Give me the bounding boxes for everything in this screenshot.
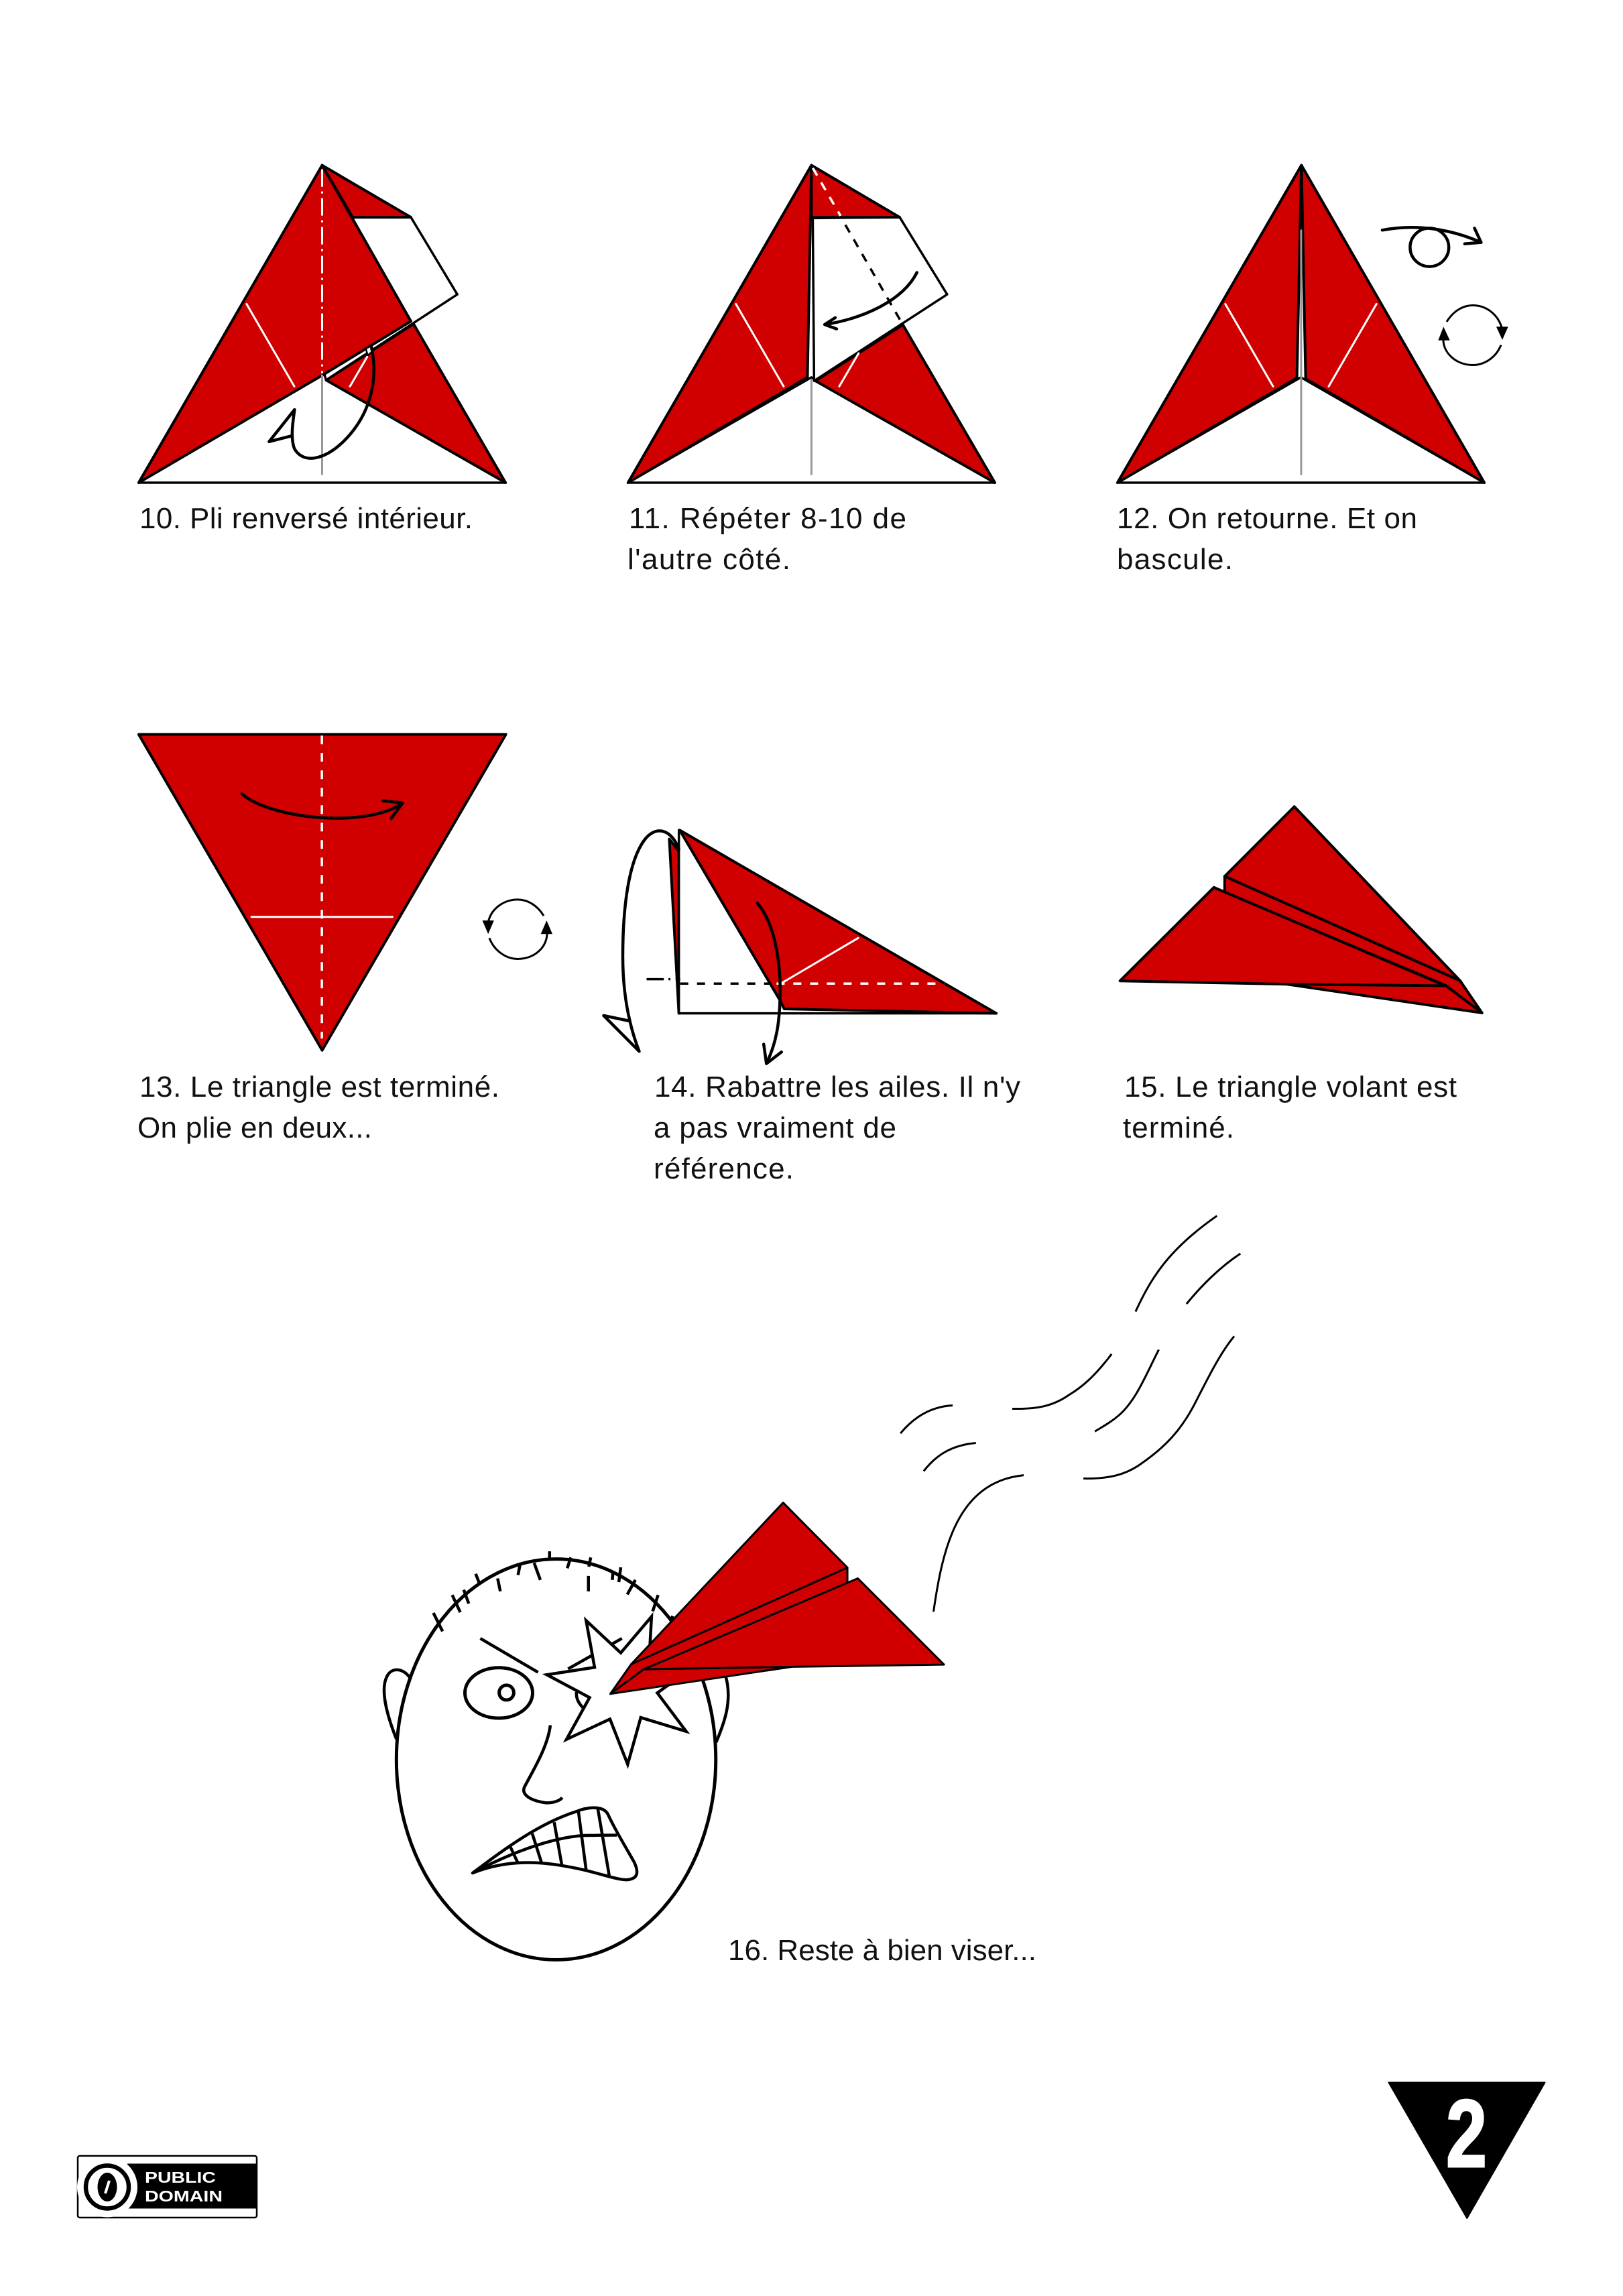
caption: step 13: On plie en deux... <box>137 1111 372 1144</box>
caption: step 13 <box>137 1071 499 1144</box>
panel: step 12 <box>1117 166 1508 576</box>
badge: public domain <box>77 2156 257 2218</box>
diagram: step 12 paper <box>1118 166 1508 483</box>
nose <box>524 1726 562 1803</box>
badge: page number <box>1389 2081 1545 2218</box>
diagram: step 10 paper <box>139 166 505 483</box>
illustration: angry face hit by glider <box>384 1503 944 1959</box>
arrow: fold toward centre <box>825 273 917 329</box>
caption: step 12: 12. On retourne. Et on <box>1117 502 1417 535</box>
panel: step 13 <box>137 735 552 1144</box>
caption: step 12: bascule. <box>1117 543 1233 576</box>
caption: step 14: référence. <box>654 1152 794 1185</box>
fold line: dashed valley <box>813 168 903 325</box>
caption: step 11: l'autre côté. <box>627 543 790 576</box>
left eye and brow <box>465 1638 538 1718</box>
right brow and eye remnants <box>568 1638 622 1707</box>
fold lines: dashed <box>646 979 945 983</box>
caption: step 16: 16. Reste à bien viser... <box>728 1934 1036 1967</box>
caption: step 15: terminé. <box>1123 1111 1234 1144</box>
arrow: left wing fold <box>603 831 679 1051</box>
caption: step 14 <box>654 1071 1020 1185</box>
icon: flip over arrow <box>1382 227 1481 267</box>
caption: step 11: 11. Répéter 8-10 de <box>629 502 906 535</box>
arrow: right wing fold <box>758 903 782 1064</box>
icon: ears <box>384 1670 728 1742</box>
panel: step 14 <box>603 830 1020 1185</box>
caption: step 11 <box>627 502 906 576</box>
diagram: step 11 paper <box>628 166 995 483</box>
badge: public domain: PUBLIC <box>145 2169 216 2186</box>
motion trails <box>900 1216 1240 1612</box>
caption: step 10: 10. Pli renversé intérieur. <box>139 502 473 535</box>
caption: step 14: a pas vraiment de <box>654 1111 896 1144</box>
icon: rotate arrows <box>1438 306 1508 365</box>
diagram: step 14 paper <box>603 830 996 1064</box>
glider in flight <box>610 1503 944 1694</box>
diagram: finished glider <box>1120 806 1482 1013</box>
icon: rotate arrows <box>483 900 552 959</box>
caption: step 15 <box>1123 1071 1457 1144</box>
caption: step 12 <box>1117 502 1417 576</box>
caption: step 15: 15. Le triangle volant est <box>1124 1071 1457 1103</box>
caption: step 13: 13. Le triangle est terminé. <box>139 1071 499 1103</box>
panel: step 16 <box>384 1216 1240 1967</box>
head outline <box>396 1559 716 1959</box>
panel: step 15 <box>1120 806 1482 1144</box>
badge: page number: 2 <box>1446 2081 1487 2187</box>
impact star <box>547 1616 686 1764</box>
hair stubble <box>433 1551 672 1632</box>
badge: public domain: DOMAIN <box>145 2187 223 2205</box>
arrow: fold in half <box>242 794 403 819</box>
panel: step 11 <box>627 166 995 576</box>
arrow: inside reverse fold <box>269 346 374 459</box>
mouth and teeth <box>473 1808 637 1880</box>
diagram: step 13 paper <box>139 735 552 1050</box>
caption: step 14: 14. Rabattre les ailes. Il n'y <box>654 1071 1020 1103</box>
panel: step 10 <box>139 166 505 535</box>
